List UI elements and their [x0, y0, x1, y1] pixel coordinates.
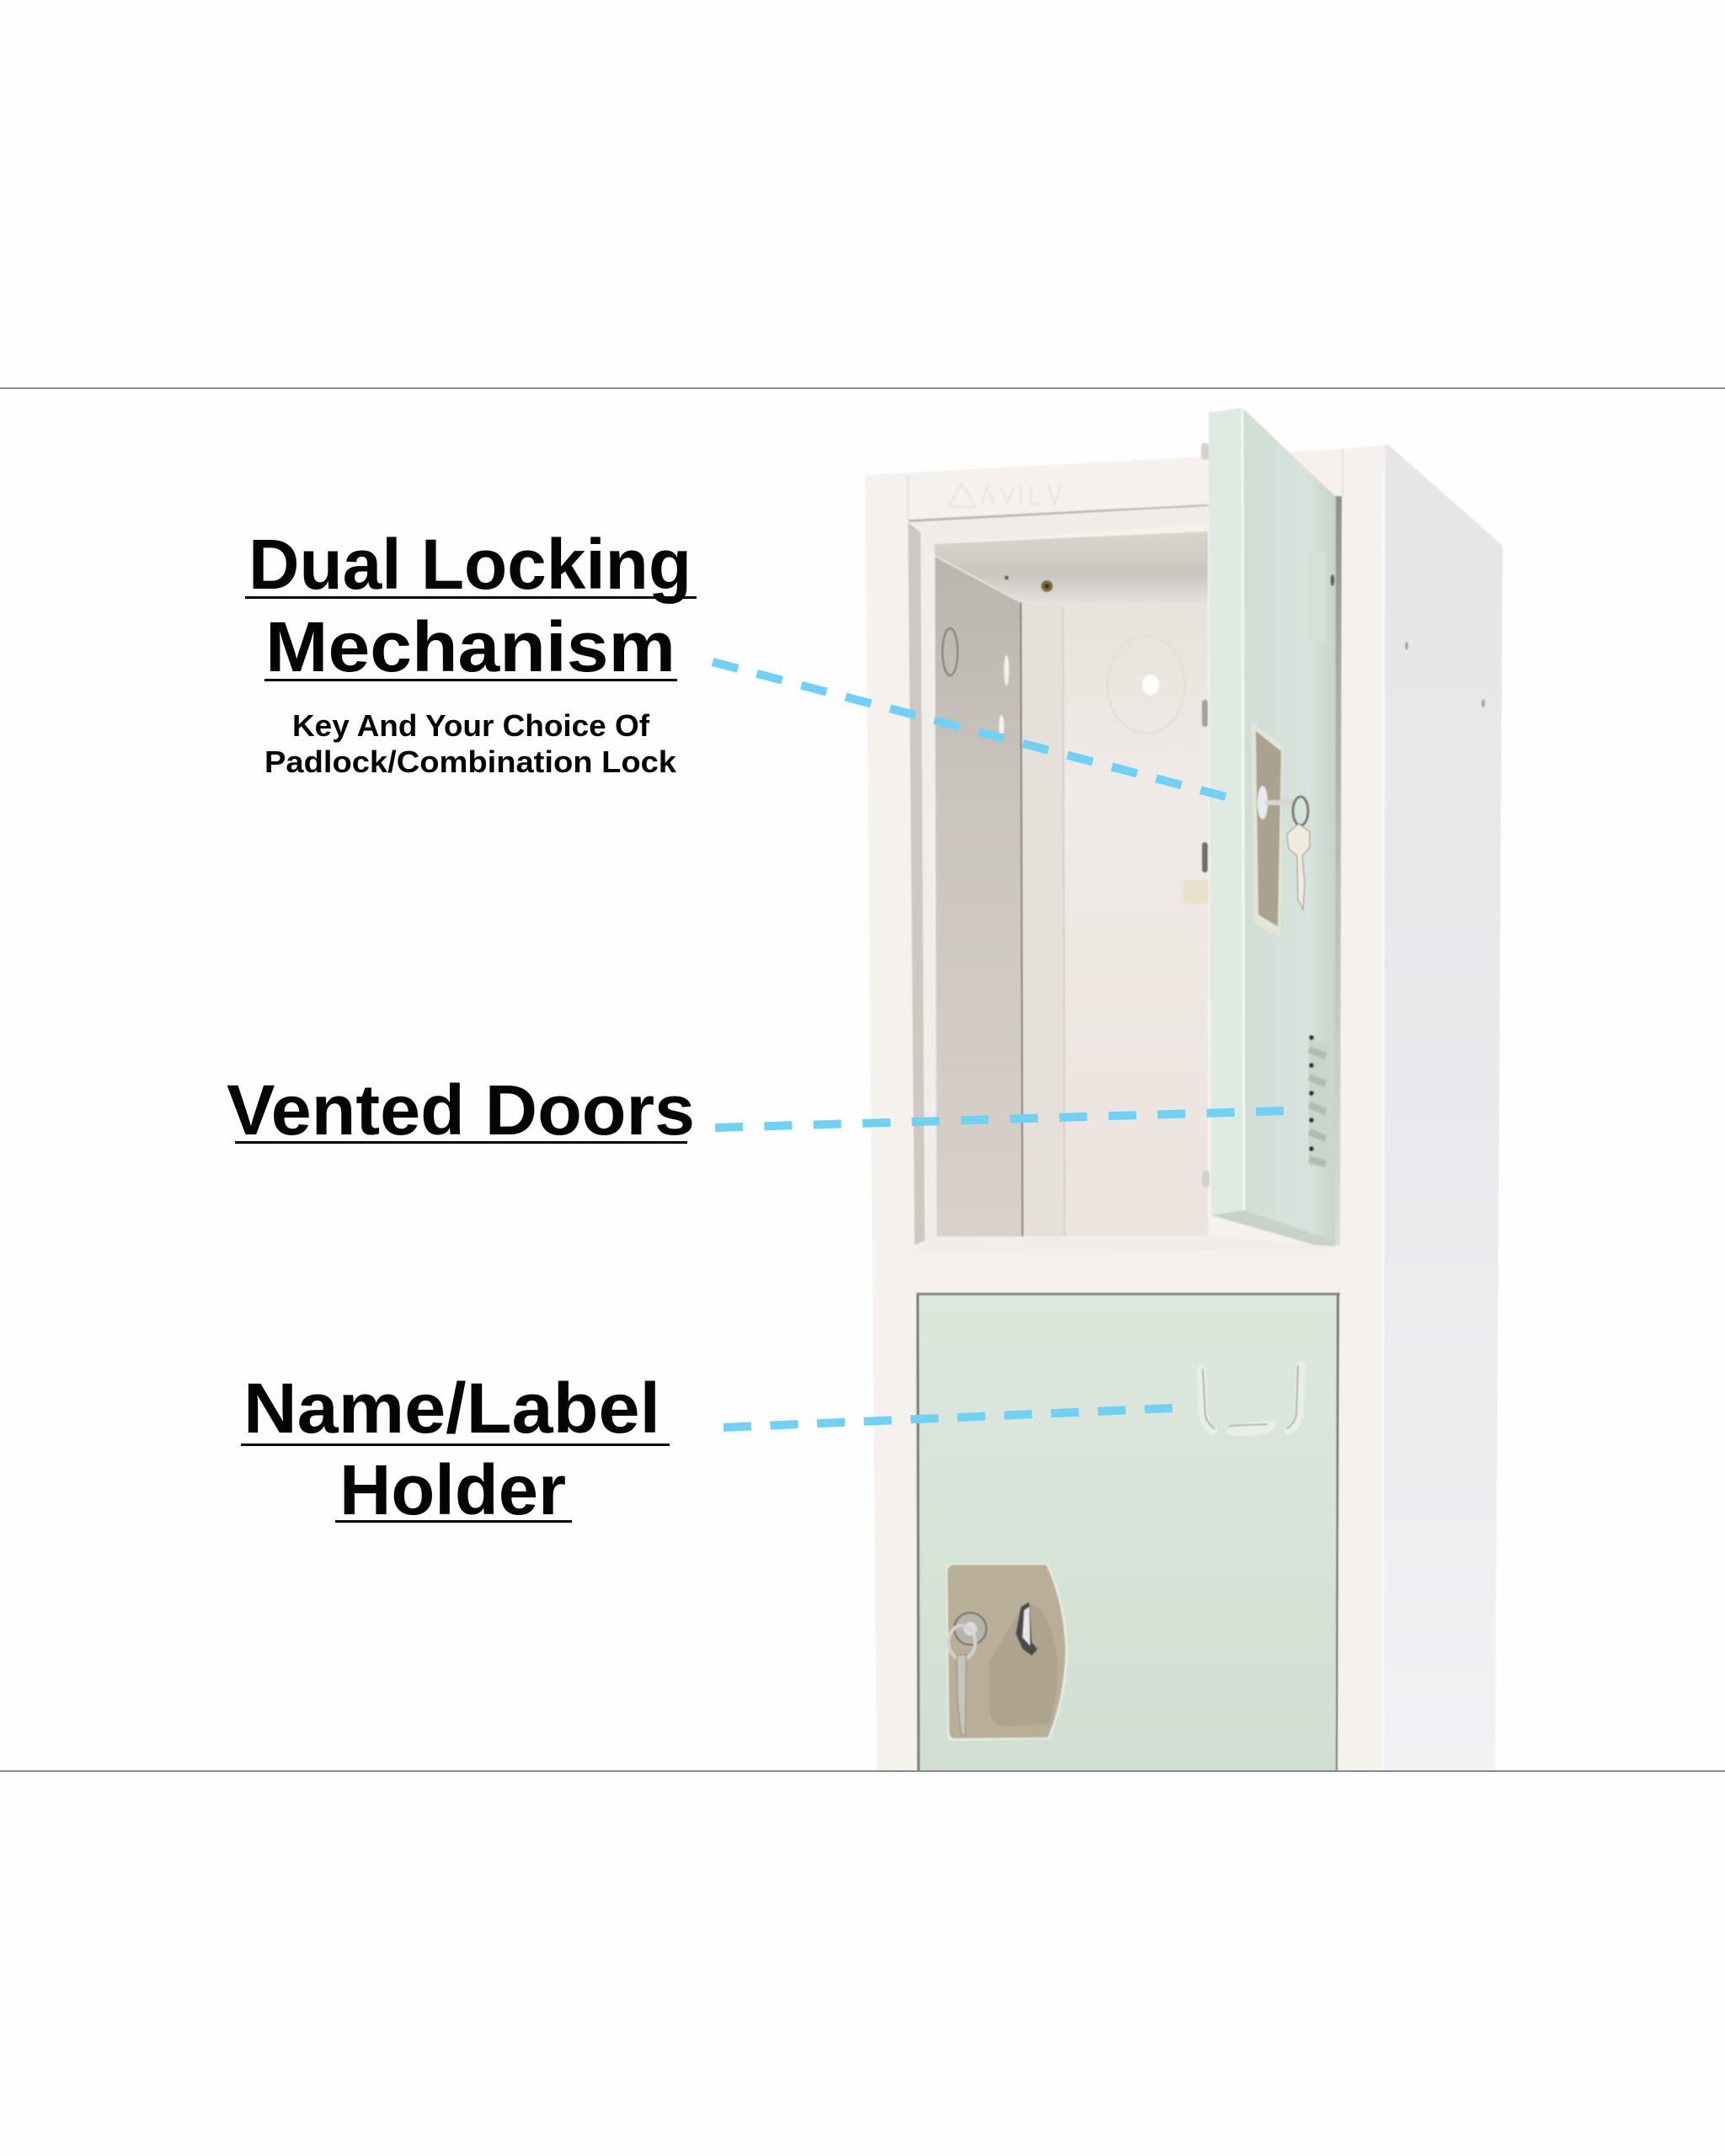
- lower lock plate: [946, 1563, 1068, 1741]
- open door, edge strip and inner face: [1209, 408, 1336, 1246]
- top divider line: [0, 387, 1725, 389]
- callout line: label holder: [724, 1408, 1172, 1428]
- bottom sill: [915, 1236, 1339, 1293]
- heading: dual locking mechanism: Mechanism: [265, 607, 676, 686]
- locker front frame: [865, 445, 1386, 1771]
- lock recess: [990, 1605, 1058, 1726]
- wall details: [943, 628, 958, 675]
- name label holder: [1201, 1366, 1300, 1433]
- heading: dual locking mechanism: Dual Locking: [248, 525, 692, 604]
- door slot: [1309, 552, 1326, 642]
- callout line: vented doors: [715, 1111, 1284, 1128]
- heading: name/label holder: Name/Label: [243, 1369, 660, 1448]
- key on open door: [1258, 786, 1310, 910]
- latch hooks and tab: [1202, 700, 1208, 727]
- hinges: [1201, 443, 1209, 460]
- bottom divider line: [0, 1770, 1725, 1772]
- callout line: dual locking: [713, 662, 1226, 797]
- door vents: [1309, 1035, 1327, 1167]
- brand emboss: [948, 483, 1061, 507]
- key in lower lock: [948, 1613, 986, 1737]
- side panel holes: [1405, 642, 1408, 650]
- heading: vented doors: Vented Doors: [227, 1070, 695, 1150]
- lower door: [916, 1293, 1340, 1771]
- locker illustration: [865, 408, 1503, 1771]
- description: lock choice: Key And Your Choice Of: [292, 708, 650, 743]
- description: lock choice: Padlock/Combination Lock: [264, 744, 677, 779]
- latch: [1016, 1602, 1038, 1656]
- interior back wall: [1021, 602, 1208, 1238]
- frame highlight: [1382, 472, 1384, 1771]
- interior ceiling: [934, 531, 1208, 604]
- heading: name/label holder: Holder: [339, 1450, 566, 1529]
- description: lock choice: [264, 708, 677, 779]
- top band: [908, 452, 1343, 520]
- bolt: [1041, 580, 1053, 592]
- left channel: [908, 522, 925, 1255]
- heading: name/label holder: [241, 1369, 670, 1529]
- locker side panel: [1383, 445, 1503, 1771]
- door lock plate: [1252, 723, 1283, 937]
- back panel knockout: [1108, 636, 1185, 734]
- back column: [1021, 602, 1065, 1238]
- interior lip: [908, 496, 1343, 544]
- interior left wall: [935, 556, 1023, 1236]
- heading: dual locking mechanism: [245, 525, 697, 686]
- right door gap: [1334, 496, 1342, 1245]
